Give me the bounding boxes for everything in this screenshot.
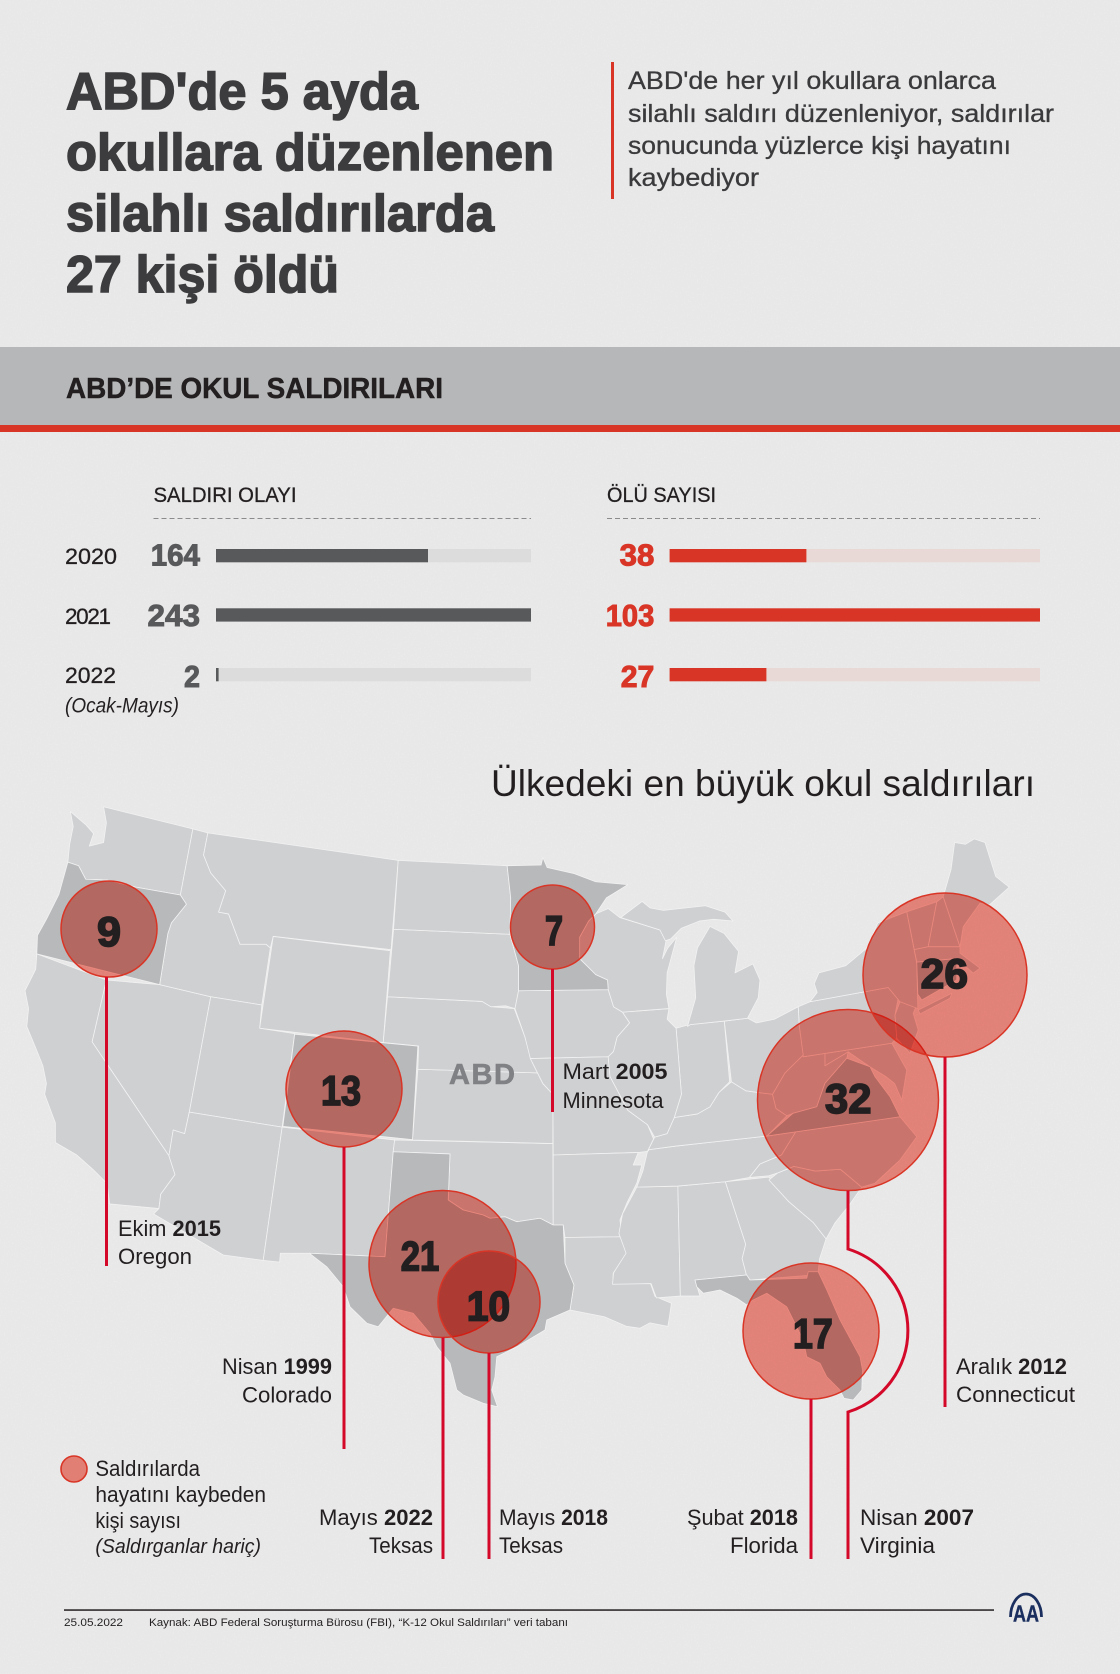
marker: Colorado: Colorado [242,1382,332,1408]
title: 27 kişi öldü [66,245,339,303]
marker: Oregon: 9 [97,908,121,955]
marker: Texas 2022: Teksas [369,1533,433,1558]
bar chart: attacks [148,484,531,694]
marker: Florida: Şubat 2018 [687,1505,798,1530]
bar chart: attacks: SALDIRI OLAYI [154,484,296,507]
year labels: 2022 [65,663,116,688]
year labels: (Ocak-Mayıs) [65,694,179,718]
intro text with red rule: sonucunda yüzlerce kişi hayatını [628,132,1011,160]
legend [61,1456,266,1558]
marker: Oregon: Ekim 2015 [118,1216,221,1241]
bar chart: deaths: 38 [620,538,654,572]
highlighted state: Colorado [283,1034,418,1140]
footer source line: 25.05.2022 [64,1617,123,1629]
marker: Florida: 17 [793,1310,833,1357]
marker: Florida [687,1263,879,1559]
intro text with red rule: ABD'de her yıl okullara onlarca [628,67,996,95]
intro text with red rule: kaybediyor [628,164,759,192]
legend: hayatını kaybeden [95,1482,266,1507]
marker: Texas 2022: Mayıs 2022 [319,1505,433,1530]
marker: Florida: Florida [730,1533,798,1558]
intro text with red rule: silahlı saldırı düzenleniyor, saldırılar [628,100,1054,128]
icon: AA logo [1010,1594,1042,1626]
marker: Oregon: Oregon [118,1244,192,1269]
intro text with red rule [611,62,1054,199]
bar chart: attacks: 243 [148,598,200,633]
highlighted state: Minnesota [507,857,628,991]
marker: Virginia: Virginia [860,1533,935,1558]
bar chart: deaths: 103 [606,598,654,633]
marker: Texas 2018 [438,1251,608,1559]
title [66,62,554,303]
marker: Connecticut: Aralık 2012 [956,1354,1067,1379]
marker: Minnesota: 7 [545,907,563,954]
bar chart: attacks: 2 [184,659,200,694]
marker: Texas 2018: Teksas [499,1533,563,1558]
icon: AA logo: AA [1013,1600,1039,1626]
highlighted state: Texas [309,1152,574,1407]
marker: Connecticut: 26 [921,950,968,997]
bar chart: attacks: 164 [151,538,201,572]
section banner: ABD’DE OKUL SALDIRILARI [66,373,443,405]
title: silahlı saldırılarda [66,184,494,242]
bar chart: deaths [606,484,1040,694]
map heading: Ülkedeki en büyük okul saldırıları [491,763,1035,804]
footer source line [64,1609,994,1629]
marker: Minnesota: Minnesota [562,1088,664,1113]
footer source line: Kaynak: ABD Federal Soruşturma Bürosu (FBI), “K-12 Okul Saldırıları” veri tabanı [149,1617,568,1629]
year labels [65,544,179,718]
legend: Saldırılarda [95,1456,200,1481]
bar chart: deaths: ÖLÜ SAYISI [607,484,716,507]
marker: Oregon [61,881,221,1269]
legend: (Saldırganlar hariç) [95,1536,261,1558]
map label: ABD: ABD [449,1059,515,1091]
marker: Minnesota: Mart 2005 [562,1059,668,1084]
title: ABD'de 5 ayda [66,62,418,120]
marker: Connecticut: Connecticut [956,1382,1076,1407]
title: okullara düzenlenen [66,123,554,181]
marker: Texas 2018: 10 [467,1283,510,1330]
marker: Virginia [758,1010,974,1559]
marker: Colorado [222,1031,402,1449]
bar chart: deaths: 27 [621,659,654,694]
year labels: 2021 [65,604,111,629]
section banner [0,347,1120,432]
marker: Colorado: Nisan 1999 [222,1354,332,1379]
highlighted state: Florida [695,1272,862,1400]
marker: Texas 2018: Mayıs 2018 [499,1505,608,1530]
map: United States [25,807,1009,1407]
highlighted state: Oregon [37,862,186,985]
highlighted state: Virginia [767,1058,900,1136]
marker: Connecticut [863,893,1076,1407]
marker: Colorado: 13 [321,1067,361,1114]
marker: Virginia: 32 [825,1075,871,1122]
highlighted state: Connecticut [917,959,957,1000]
year labels: 2020 [65,544,117,569]
legend: kişi sayısı [95,1508,181,1533]
marker: Texas 2022: 21 [401,1233,439,1280]
marker: Minnesota [510,885,668,1113]
marker: Virginia: Nisan 2007 [860,1505,974,1530]
marker: Texas 2022 [319,1190,516,1559]
